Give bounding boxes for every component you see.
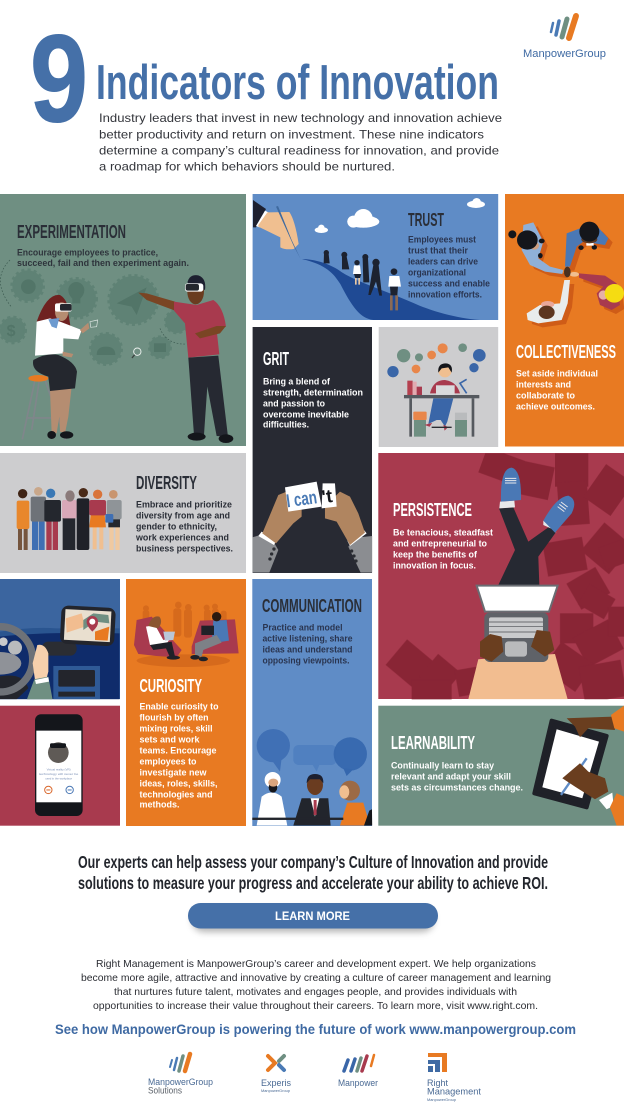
description: sets and work [140, 734, 200, 744]
call to action heading [78, 852, 548, 893]
right management paragraph [81, 958, 551, 1012]
illustration: smartphone survey: technology will never be [39, 772, 79, 776]
website call out: See how ManpowerGroup is powering the future of work www.manpowergroup.com [55, 1022, 576, 1037]
description [140, 702, 219, 810]
heading: CURIOSITY [140, 676, 202, 696]
intro paragraph: a roadmap for which behaviors should be nurtured. [99, 160, 395, 174]
heading: DIVERSITY [136, 473, 197, 493]
right management paragraph: that nurtures future talent, motivates and engages people, and provides individuals with [114, 986, 517, 998]
illustration: hands tearing I can't note: 't [320, 485, 334, 507]
description [263, 376, 363, 430]
heading: GRIT [263, 349, 289, 369]
illustration: overhead laptop with crossed legs [386, 447, 624, 703]
description: Be tenacious, steadfast [393, 528, 493, 538]
description: and passion to [263, 398, 325, 408]
logo: Experis [261, 1056, 291, 1093]
description: diversity from age and [136, 510, 230, 520]
intro paragraph [99, 111, 502, 174]
learn more button: LEARN MORE [275, 911, 350, 923]
ManpowerGroup logo: ManpowerGroup [523, 48, 606, 60]
description [391, 760, 523, 792]
learn more button [188, 903, 438, 932]
illustration: hands tearing I can't note [252, 482, 372, 573]
logo: Experis: Experis [261, 1078, 291, 1089]
description: and entrepreneurial to [393, 538, 487, 548]
description [408, 234, 490, 300]
big numeral 9: 9 [30, 10, 88, 148]
illustration: VR gears and two people [0, 260, 233, 443]
description: succeed, fail and then experiment again. [17, 258, 189, 268]
description: opposing viewpoints. [262, 656, 350, 666]
illustration: smartphone survey [35, 714, 83, 816]
description: flourish by often [140, 712, 209, 722]
description: interests and [516, 380, 571, 390]
description: business perspectives. [136, 544, 233, 554]
description: Encourage employees to practice, [17, 248, 158, 258]
panel: navigation illustration [0, 579, 120, 700]
illustration: hands using tablet with stylus [534, 706, 624, 826]
description: overcome inevitable [263, 410, 349, 420]
logo: ManpowerGroup Solutions: Solutions [148, 1086, 182, 1096]
description [17, 248, 189, 268]
description: mixing roles, skill [140, 724, 212, 734]
illustration: car dashboard with GPS [0, 605, 120, 700]
description: investigate new [140, 768, 207, 778]
description: innovation efforts. [408, 290, 482, 300]
description: achieve outcomes. [516, 402, 595, 412]
description [262, 622, 353, 666]
panel: experimentation [0, 194, 246, 446]
description [393, 528, 493, 570]
illustration: two colleagues on bean bags [134, 602, 239, 667]
panel: phone illustration [0, 706, 120, 826]
logo: Right Management: Right [427, 1078, 448, 1089]
logo: ManpowerGroup Solutions: ManpowerGroup [148, 1077, 213, 1087]
description: Enable curiosity to [140, 702, 219, 712]
heading: PERSISTENCE [393, 500, 472, 520]
heading: LEARNABILITY [391, 733, 475, 753]
intro paragraph: better productivity and return on investment. These nine indicators [99, 128, 484, 142]
description: technologies and [140, 790, 213, 800]
description: employees to [140, 756, 197, 766]
illustration: smartphone survey: Virtual reality (VR) [47, 768, 71, 772]
description: teams. Encourage [140, 746, 216, 756]
right management paragraph: opportunities to increase their value throughout their careers. To learn more, visit www.right.com. [93, 1000, 538, 1012]
heading: TRUST [408, 210, 444, 230]
panel: collectiveness [505, 194, 624, 446]
description: Employees must [408, 234, 476, 244]
description: keep the benefits of [393, 550, 478, 560]
description: organizational [408, 268, 466, 278]
right management paragraph: Right Management is ManpowerGroup’s career and development expert. We help organizations [96, 958, 536, 970]
illustration: smartphone survey: used in the workplace [45, 776, 72, 780]
description: leaders can drive [408, 256, 478, 266]
panel: communication [252, 579, 372, 826]
description: Embrace and prioritize [136, 500, 232, 510]
panel: curiosity [126, 579, 246, 826]
illustration: three people in conversation [252, 729, 372, 826]
description: gender to ethnicity, [136, 522, 217, 532]
illustration: diverse group of seven people [17, 487, 122, 550]
heading: COMMUNICATION [262, 596, 362, 616]
description: difficulties. [263, 420, 309, 430]
panel: grit [252, 327, 372, 573]
logo: Right Management: Management [427, 1086, 481, 1098]
illustration: four colleagues joining hands from above [508, 222, 624, 327]
logo: Right Management: ManpowerGroup [427, 1097, 457, 1102]
description: ideas, roles, skills, [140, 778, 218, 788]
description: relevant and adapt your skill [391, 772, 511, 782]
heading: EXPERIMENTATION [17, 222, 126, 242]
description: innovation in focus. [393, 560, 476, 570]
logo: Manpower: Manpower [338, 1078, 378, 1088]
panel: learnability [378, 706, 624, 826]
description: active listening, share [262, 634, 352, 644]
description: Continually learn to stay [391, 760, 495, 770]
illustration: hands tearing I can't note: I can [285, 486, 318, 511]
panel: persistence [378, 447, 624, 703]
description: success and enable [408, 278, 490, 288]
description: collaborate to [516, 390, 575, 400]
illustration: VR gears and two people: $ [7, 323, 16, 340]
panel: diversity [0, 453, 246, 573]
description [516, 368, 598, 412]
description: Bring a blend of [263, 376, 331, 386]
description: work experiences and [135, 532, 229, 542]
description: strength, determination [263, 388, 363, 398]
logo: Right Management [427, 1053, 481, 1102]
description: sets as circumstances change. [391, 782, 523, 792]
right management paragraph: become more agile, attractive and innovative by creating a culture of career management and learning [81, 972, 551, 984]
ManpowerGroup logo [523, 16, 606, 60]
description: Practice and model [262, 622, 342, 632]
description: trust that their [408, 246, 468, 256]
intro paragraph: determine a company’s cultural readiness for innovation, and provide [99, 144, 499, 158]
panel: trust [253, 194, 498, 320]
illustration: woman at desk with floating icons [387, 343, 486, 437]
intro paragraph: Industry leaders that invest in new technology and innovation achieve [99, 111, 502, 125]
description: Set aside individual [516, 368, 598, 378]
illustration: hand drawing path with walking people [253, 198, 485, 320]
description: ideas and understand [262, 644, 353, 654]
description [135, 500, 233, 554]
logo: ManpowerGroup Solutions [148, 1054, 213, 1096]
panel: desk illustration [379, 327, 498, 447]
description: methods. [140, 800, 180, 810]
logo: Experis: ManpowerGroup [261, 1088, 291, 1093]
logo: Manpower [338, 1055, 378, 1088]
